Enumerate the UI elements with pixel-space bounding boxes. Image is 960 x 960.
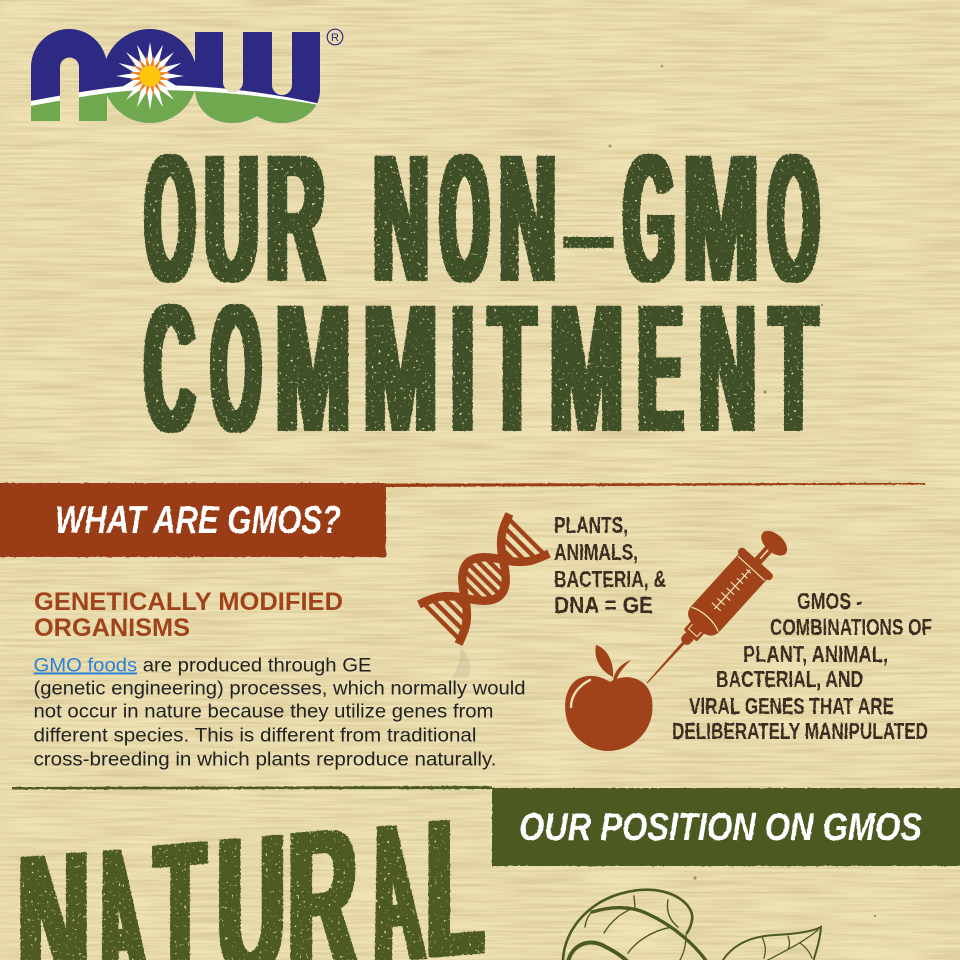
text block: GMO foods description: different species. This is different from traditional <box>34 724 476 746</box>
icon: apple <box>565 645 653 751</box>
text: plants, animals, bacteria: BACTERIA, & <box>554 566 666 592</box>
icon: sunburst <box>116 42 184 110</box>
title: Our Non-GMO Commitment: M <box>550 268 623 470</box>
title: Our Non-GMO Commitment: O <box>145 117 195 320</box>
text: plants, animals, bacteria: ANIMALS, <box>554 539 638 565</box>
text block: GMO foods description: cross-breeding in which plants reproduce naturally. <box>34 748 497 770</box>
title: Our Non-GMO Commitment: I <box>451 268 474 471</box>
icon: DNA helix <box>419 514 549 644</box>
banner: our position on GMOs <box>12 786 960 866</box>
logo: NOW <box>31 28 344 123</box>
title: Our Non-GMO Commitment: M <box>684 117 758 320</box>
title: Our Non-GMO Commitment: T <box>489 267 535 470</box>
text: plants, animals, bacteria: PLANTS, <box>554 512 628 538</box>
title: Our Non-GMO Commitment: N <box>499 116 556 320</box>
text: GMOs combinations: BACTERIAL, AND <box>716 666 863 692</box>
text block: GMO foods description: not occur in nature because they utilize genes from <box>34 700 494 722</box>
title: Our Non-GMO Commitment: T <box>770 267 817 470</box>
text block: GMO foods description: (genetic engineering) processes, which normally would <box>34 678 526 700</box>
title: Our Non-GMO Commitment: E <box>638 268 683 471</box>
text: GMOs combinations: PLANT, ANIMAL, <box>743 641 888 667</box>
banner: what are GMOs <box>0 483 925 557</box>
text: GMOs combinations: GMOS - <box>797 588 862 614</box>
text: GMOs combinations <box>672 588 932 744</box>
title: Our Non-GMO Commitment: N <box>373 117 429 320</box>
heading: genetically modified organisms: GENETICALLY MODIFIED <box>34 588 343 616</box>
title: Our Non-GMO Commitment: N <box>699 266 756 470</box>
text: plants, animals, bacteria <box>554 512 666 618</box>
title: Our Non-GMO Commitment: G <box>624 116 675 320</box>
icon: syringe <box>631 522 797 698</box>
icon: DNA shadow <box>452 646 470 678</box>
title: Our Non-GMO Commitment: O <box>211 267 261 470</box>
title: Our Non-GMO Commitment: - <box>561 184 616 286</box>
text block: GMO foods description: GMO foods are produced through GE <box>34 654 372 676</box>
title: Our Non-GMO Commitment <box>145 116 819 471</box>
heading: genetically modified organisms: ORGANISMS <box>34 614 190 642</box>
title: Our Non-GMO Commitment: O <box>440 116 489 320</box>
title: Our Non-GMO Commitment: M <box>276 267 350 470</box>
title: Our Non-GMO Commitment: C <box>145 267 194 471</box>
registered mark: R <box>331 32 339 44</box>
banner: what are GMOs: WHAT ARE GMOS? <box>55 499 341 542</box>
title: Our Non-GMO Commitment: M <box>364 268 437 470</box>
title: Our Non-GMO Commitment: R <box>266 116 325 320</box>
title: Our Non-GMO Commitment: O <box>768 116 819 320</box>
title: Natural <box>18 773 484 960</box>
heading: genetically modified organisms <box>34 588 343 642</box>
title: Our Non-GMO Commitment: U <box>205 117 258 320</box>
text: plants, animals, bacteria: DNA = GE <box>554 592 653 618</box>
icon: leaves <box>563 890 821 960</box>
registered mark <box>327 29 343 45</box>
text block: GMO foods description <box>34 654 526 770</box>
